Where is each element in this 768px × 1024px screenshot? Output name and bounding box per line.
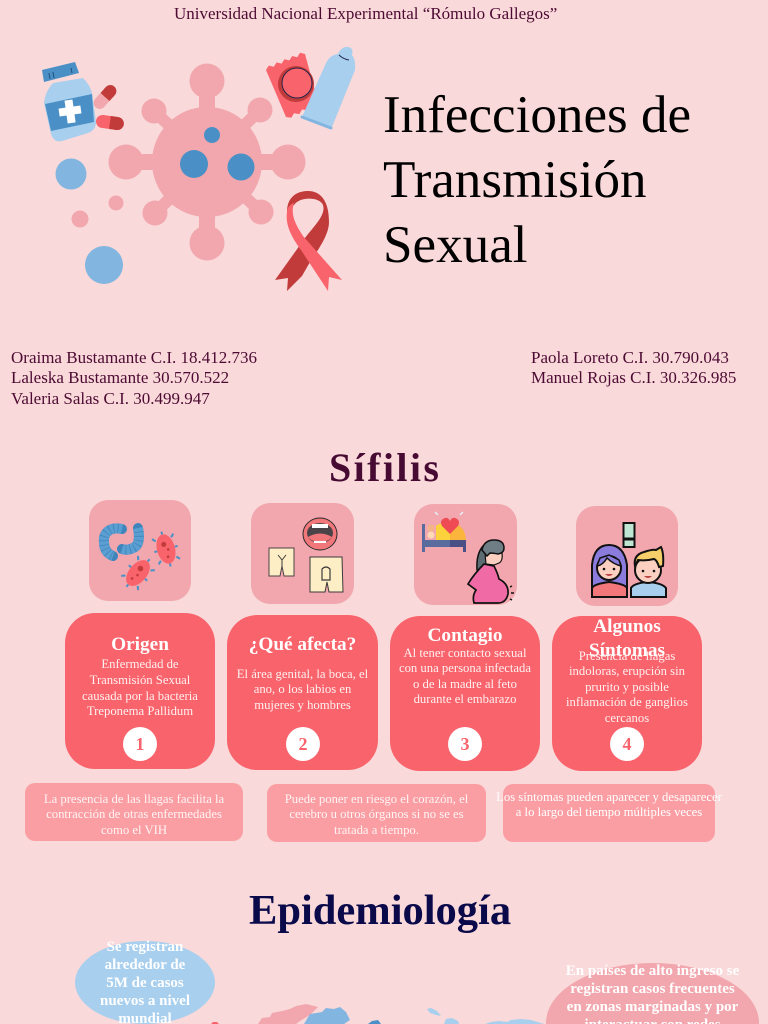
card heading: Síntomas <box>589 640 665 661</box>
callout text: high-income countries: en zonas marginadas y por <box>567 999 738 1015</box>
step number 1 <box>123 727 157 761</box>
card text: Al tener contacto sexual <box>404 646 526 660</box>
authors: right column: Paola Loreto C.I. 30.790.043 <box>531 348 729 367</box>
note: recurring symptoms: Los síntomas pueden aparecer y desaparecer <box>496 790 722 804</box>
card text: durante el embarazo <box>414 692 516 706</box>
card text: prurito y posible <box>585 680 669 694</box>
step number 3: 3 <box>460 734 470 754</box>
map: blue region <box>304 1007 350 1024</box>
callout text: global cases <box>100 939 190 1024</box>
map: red region <box>211 1022 219 1024</box>
map: dark blue region <box>368 1020 381 1024</box>
note: VIH risk: como el VIH <box>101 823 167 837</box>
step number 4 <box>610 727 644 761</box>
title: Sexual <box>383 216 528 274</box>
note: VIH risk: contracción de otras enfermedades <box>46 807 222 821</box>
map: pink region <box>258 1004 318 1024</box>
card heading: ¿Qué afecta? <box>249 634 356 655</box>
callout: global cases <box>75 941 215 1024</box>
authors: left column: Laleska Bustamante 30.570.522 <box>11 368 229 387</box>
card text: ano, o los labios en <box>254 682 351 696</box>
callout text: global cases: nuevos a nivel <box>100 993 190 1009</box>
card text: indoloras, erupción sin <box>569 664 685 678</box>
icon tile: bacteria <box>89 500 191 601</box>
card 3: Contagio <box>390 616 540 771</box>
icon: virus <box>108 64 306 260</box>
card 4: Algunos Síntomas <box>552 616 702 771</box>
icon tile: affected body areas <box>251 503 354 604</box>
card text: con una persona infectada <box>399 661 531 675</box>
title: Transmisión <box>383 151 647 209</box>
icon: capsules <box>91 83 125 131</box>
card text <box>566 649 688 725</box>
note: organ risk: Puede poner en riesgo el corazón, el <box>285 792 468 806</box>
card text: mujeres y hombres <box>254 698 351 712</box>
note: organ risk <box>267 784 486 842</box>
note: VIH risk: La presencia de las llagas facilita la <box>44 792 224 806</box>
card text <box>82 657 198 718</box>
card heading: Contagio <box>428 625 502 646</box>
icon: condom packet <box>266 53 318 118</box>
map: light blue regions <box>427 1008 544 1024</box>
heading: Epidemiología: Epidemiología <box>249 887 511 934</box>
card text: Enfermedad de <box>101 657 179 671</box>
world map fragment <box>211 1004 544 1024</box>
step number 3 <box>448 727 482 761</box>
step number 2: 2 <box>298 734 308 754</box>
callout: high-income countries <box>546 963 759 1024</box>
icon: floating particles <box>56 158 124 284</box>
authors: left column: Valeria Salas C.I. 30.499.947 <box>11 389 210 408</box>
card text: inflamación de ganglios <box>566 695 688 709</box>
card 1: Origen <box>65 613 215 769</box>
authors: left column: Oraima Bustamante C.I. 18.412.736 <box>11 348 257 367</box>
card text <box>399 646 531 706</box>
icon: awareness ribbon <box>275 191 342 291</box>
card 2: ¿Qué afecta? <box>227 615 378 770</box>
note: recurring symptoms: a lo largo del tiempo múltiples veces <box>516 805 702 819</box>
callout text: high-income countries <box>566 963 739 1024</box>
note: recurring symptoms <box>503 784 715 842</box>
icon: condom <box>302 47 355 128</box>
step number 2 <box>286 727 320 761</box>
authors: right column: Manuel Rojas C.I. 30.326.985 <box>531 368 736 387</box>
card text <box>237 667 368 712</box>
card text: El área genital, la boca, el <box>237 667 368 681</box>
icon tile: contagion <box>414 504 517 605</box>
card text: Treponema Pallidum <box>87 704 193 718</box>
card text: causada por la bacteria <box>82 689 198 703</box>
header: university name: Universidad Nacional Experimental “Rómulo Gallegos” <box>174 4 557 23</box>
authors: right column <box>531 348 736 387</box>
card text: cercanos <box>605 711 649 725</box>
note: VIH risk <box>25 783 243 841</box>
callout text: global cases: Se registran <box>107 939 183 955</box>
title: Infecciones de <box>383 86 691 144</box>
step number 1: 1 <box>136 734 144 754</box>
icon tile: symptoms <box>576 506 678 606</box>
card text: Transmisión Sexual <box>90 673 190 687</box>
icon: medicine bottle <box>42 62 96 141</box>
card heading: Algunos <box>593 616 661 637</box>
title <box>383 86 691 274</box>
heading: Sífilis: Sífilis <box>329 445 441 490</box>
step number 4: 4 <box>622 734 632 754</box>
authors: left column <box>11 348 257 408</box>
card heading: Origen <box>111 634 169 655</box>
callout text: global cases: 5M de casos <box>106 975 184 991</box>
callout text: high-income countries: En países de alto ingreso se <box>566 963 739 979</box>
card text: o de la madre al feto <box>413 677 517 691</box>
note: organ risk: cerebro u otros órganos si no se es <box>289 807 464 821</box>
card text: Presencia de llagas <box>579 649 675 663</box>
callout text: high-income countries: registran casos frecuentes <box>570 981 735 997</box>
note: organ risk: tratada a tiempo. <box>334 823 419 837</box>
card heading <box>589 616 665 661</box>
illustration: virus, medicine, condom and ribbon <box>42 46 356 291</box>
callout text: global cases: alrededor de <box>105 957 185 973</box>
